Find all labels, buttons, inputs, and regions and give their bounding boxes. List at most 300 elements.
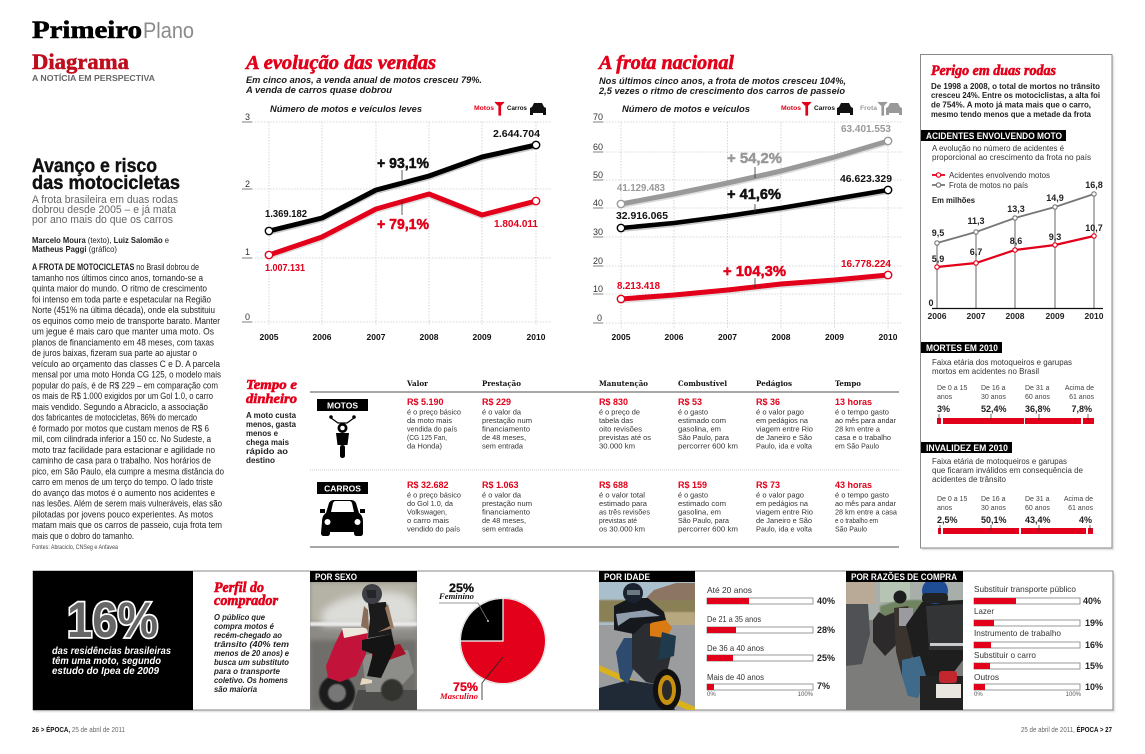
table cells: cars row: as três revisões: [599, 508, 650, 516]
table cells: motorcycles row: em pedágios na: [756, 416, 809, 425]
fleet subheading: Nos últimos cinco anos, a frota de motos cresceu 104%,: [599, 76, 846, 87]
article body text: é formado por motos que custam menos de R$ 6: [32, 423, 209, 433]
callout: 16 percent: 16%: [67, 592, 158, 648]
table cells: motorcycles row: gasolina, em: [678, 424, 721, 434]
table cells: cars row: do Gol 1.0, da: [407, 499, 454, 508]
line chart: sales: 1.804.011: [494, 218, 538, 230]
line chart: fleet: 46.623.329: [840, 173, 892, 185]
bar chart: by purchase reason: Instrumento de trabalho: [974, 629, 1061, 638]
line chart: accidents vs fleet: 14,9: [1046, 193, 1064, 203]
table cells: motorcycles row: R$ 53: [678, 397, 702, 407]
line chart: sales: 2010: [527, 332, 546, 342]
row label: motos: [317, 399, 368, 411]
line chart: accidents vs fleet: 2007: [967, 311, 986, 321]
sources note: Fontes: Abraciclo, CNSeg e Anfavea: [32, 545, 119, 551]
table cells: cars row: R$ 159: [678, 480, 707, 490]
line chart: fleet: + 54,2%: [727, 151, 782, 167]
stacked bar: disability by age: anos: [937, 505, 953, 512]
accidents legend: Frota de motos no país: [949, 181, 1028, 190]
bar chart: by age: Até 20 anos: [707, 586, 752, 595]
line chart: fleet: 60: [593, 142, 603, 152]
line chart: accidents vs fleet: 10,7: [1085, 223, 1103, 233]
bar chart: by purchase reason: 0%: [974, 692, 983, 698]
heading: Tempo e dinheiro: Tempo e: [246, 378, 297, 393]
table cells: motorcycles row: viagem entre Rio: [756, 424, 813, 434]
table intro text: menos e: [246, 429, 279, 438]
stacked bar: disability by age: 61 anos: [1068, 505, 1093, 512]
article headline: [32, 156, 180, 194]
chart legend: Motos: [474, 105, 494, 112]
chart legend: Carros: [507, 105, 527, 112]
article body text: mais vendido. Segundo a Abraciclo, a associação: [32, 402, 208, 412]
section header: Primeiro Plano: Primeiro: [32, 17, 142, 44]
line chart: accidents vs fleet: [928, 180, 1104, 321]
stacked bar: disability by age: 60 anos: [1025, 505, 1050, 512]
table cells: motorcycles row: em São Paulo: [835, 442, 879, 450]
row label: carros: [317, 482, 368, 494]
section header: Primeiro Plano: Plano: [143, 18, 194, 43]
bar chart: by purchase reason: 100%: [1066, 692, 1082, 698]
line chart: fleet: 2010: [879, 332, 898, 342]
table cells: motorcycles row: [407, 397, 896, 450]
stacked bar: disability by age: Acima de: [1064, 496, 1093, 503]
table column headers: Valor: [406, 379, 428, 388]
article body text: tamanho nos últimos cinco anos, tornando-se a: [32, 273, 203, 283]
buyer profile text: trânsito (40% tem: [214, 639, 290, 649]
byline: Marcelo Moura (texto), Luiz Salomão e: [32, 235, 169, 245]
table column headers: Combustível: [678, 379, 727, 388]
panel intro text: cresceu 24%. Entre os motociclistas, a alta foi: [931, 91, 1100, 100]
buyer profile text: para o transporte: [213, 666, 280, 676]
bar chart: by age: 100%: [798, 692, 814, 698]
article body text: pico, em São Paulo, ela cumpre a mesma distância do: [32, 466, 224, 476]
table cells: cars row: é o valor total: [599, 490, 645, 500]
heading: Perfil do comprador: comprador: [214, 593, 278, 609]
table cells: cars row: R$ 1.063: [482, 480, 519, 490]
bar chart: by purchase reason: Lazer: [974, 607, 994, 616]
panel intro text: De 1998 a 2008, o total de mortos no trânsito: [931, 82, 1100, 91]
bar chart: by age: De 21 a 35 anos: [707, 615, 761, 624]
footer: right page folio: 25 de abril de 2011, ÉPOCA > 27: [1021, 725, 1112, 734]
article body text: caminho de casa para o trabalho. Nos horários de: [32, 456, 211, 466]
section label: Diagrama: [32, 49, 155, 83]
table cells: cars row: o carro mais: [407, 516, 449, 525]
table cells: motorcycles row: 13 horas: [835, 397, 872, 407]
table cells: cars row: ao mês para andar: [835, 499, 896, 508]
line chart: accidents vs fleet: 0: [928, 298, 934, 308]
panel intro text: mesmo tendo menos que a metade da frota: [931, 110, 1091, 119]
panel: buyer profile strip: [33, 571, 1115, 712]
article body text: mais que o dobro do tamanho.: [32, 531, 134, 541]
article body text: os mais de R$ 1.000 exigidos por um Gol 1.0, o carro: [32, 391, 213, 401]
section label: Diagrama: A NOTÍCIA EM PERSPECTIVA: [32, 73, 155, 83]
article body text: os equinos como meio de transporte barato. Manter: [32, 316, 220, 326]
article body text: carro em menos de um terço do tempo. O lado triste: [32, 477, 213, 487]
stacked bar: deaths by age: 7,8%: [1071, 404, 1092, 414]
line chart: fleet: 50: [593, 170, 603, 180]
panel: national fleet: [593, 52, 903, 342]
pie chart: by sex: 25%: [449, 581, 474, 595]
accidents description: A evolução no número de acidentes é: [932, 144, 1065, 153]
panel: sales evolution: [242, 52, 551, 342]
table cells: motorcycles row: tabela das: [599, 416, 633, 425]
article body text: veículo ao orçamento das classes C e D. A parcela: [32, 359, 220, 369]
stacked bar: disability by age: 43,4%: [1025, 515, 1051, 525]
disability description: que ficaram inválidos em consequência de: [932, 466, 1084, 475]
table intro text: menos, gasta: [246, 420, 297, 429]
bar chart: by age: 0%: [707, 692, 716, 698]
line chart: fleet: 2007: [718, 332, 737, 342]
sales subheading: A venda de carros quase dobrou: [245, 85, 392, 96]
chart title: Número de motos e veículos: [622, 104, 750, 115]
table cells: motorcycles row: Paulo, ida e volta: [756, 442, 813, 450]
article body text: mensal por uma moto Honda CG 125, o modelo mais: [32, 370, 222, 380]
bar chart: by age: 40%: [817, 596, 835, 606]
table cells: cars row: 28 km entre a casa: [835, 508, 898, 516]
table cells: cars row: R$ 688: [599, 480, 628, 490]
disability description: Faixa etária de motoqueiros e garupas: [932, 457, 1067, 466]
bar chart: by purchase reason: Outros: [974, 673, 999, 682]
stacked bar: deaths by age: [937, 385, 1094, 424]
table cells: motorcycles row: estimado com: [678, 416, 726, 425]
line chart: fleet: 0: [597, 313, 602, 323]
stacked bar: disability by age: De 0 a 15: [937, 496, 967, 503]
buyer profile text: coletivo. Os homens: [214, 675, 288, 685]
table cells: cars row: [407, 480, 898, 534]
footer: left page folio: 26 > ÉPOCA, 25 de abril de 2011: [32, 725, 125, 734]
line chart: sales: 2009: [473, 332, 492, 342]
line chart: accidents vs fleet: 9,5: [932, 228, 944, 238]
stacked bar: deaths by age: De 0 a 15: [937, 385, 967, 392]
table cells: cars row: prestação num: [482, 499, 532, 508]
panel: danger on two wheels: [920, 54, 1114, 550]
table cells: motorcycles row: São Paulo, para: [678, 433, 730, 442]
line chart: accidents vs fleet: 2006: [928, 311, 947, 321]
line chart: sales: 1.369.182: [265, 208, 307, 220]
line chart: fleet: 8.213.418: [617, 280, 660, 292]
stacked bar: disability by age: De 16 a: [981, 496, 1006, 503]
subheading bar: mortes: MORTES EM 2010: [926, 343, 998, 354]
stacked bar: disability by age: 2,5%: [937, 515, 958, 525]
line chart: sales: 2.644.704: [493, 128, 540, 140]
line chart: sales: 2006: [313, 332, 332, 342]
stacked bar: deaths by age: 3%: [937, 404, 950, 414]
heading: A evolução das vendas: A evolução das vendas: [244, 52, 436, 74]
buyer profile text: [213, 612, 290, 694]
table cells: cars row: Volkswagen,: [407, 508, 447, 516]
line chart: accidents vs fleet: 5,9: [932, 254, 944, 264]
table cells: cars row: São Paulo: [835, 524, 867, 534]
line chart: sales: 3: [245, 112, 250, 122]
table cells: motorcycles row: de Janeiro e São: [756, 433, 812, 442]
bar chart: by age: 28%: [817, 625, 835, 635]
line chart: sales: 2008: [420, 332, 439, 342]
chart legend: [781, 102, 902, 115]
buyer profile text: são maioria: [214, 684, 257, 694]
accidents legend: Acidentes envolvendo motos: [949, 171, 1050, 180]
line chart: fleet: 2006: [665, 332, 684, 342]
table column headers: [406, 379, 861, 388]
unit label: Em milhões: [932, 196, 976, 205]
table cells: motorcycles row: é o valor da: [482, 408, 522, 416]
table column headers: Tempo: [835, 379, 861, 388]
chart legend: Motos: [781, 105, 801, 112]
buyer profile text: busca um substituto: [214, 657, 289, 667]
line chart: accidents vs fleet: 2008: [1006, 311, 1025, 321]
article subheading: A frota brasileira em duas rodas: [32, 194, 178, 206]
chart legend: [474, 102, 546, 115]
accidents legend: [932, 171, 1050, 190]
callout: 16 percent: [33, 571, 193, 710]
subheading bar: invalidez: INVALIDEZ EM 2010: [926, 443, 1008, 454]
table cells: motorcycles row: percorrer 600 km: [678, 442, 738, 450]
line chart: fleet: 2005: [612, 332, 631, 342]
table cells: motorcycles row: é o preço básico: [407, 408, 461, 416]
bar chart: by age: Mais de 40 anos: [707, 673, 764, 682]
line chart: accidents vs fleet: 2009: [1046, 311, 1065, 321]
buyer profile text: compra motos é: [214, 621, 274, 631]
line chart: accidents vs fleet: 16,8: [1085, 180, 1103, 190]
article body text: de juros baixas, fizeram sua parte ao ajustar o: [32, 348, 197, 358]
article body text: pilotadas por jovens pouco experientes. As motos: [32, 510, 214, 520]
article body text: planos de financiamento em 48 meses, com taxas: [32, 337, 215, 347]
line chart: accidents vs fleet: 9,3: [1049, 232, 1061, 242]
article body text: foi intenso em toda parte e espetacular na Região: [32, 294, 211, 304]
bar chart: by purchase reason: 15%: [1085, 661, 1103, 671]
bar chart: by purchase reason: Substituir o carro: [974, 651, 1036, 660]
table cells: cars row: Paulo, ida e volta: [756, 524, 813, 534]
table cells: motorcycles row: da Honda): [407, 442, 442, 450]
buyer profile text: O público que: [214, 612, 265, 622]
table cells: cars row: é o valor pago: [756, 490, 804, 500]
callout: 16 percent: das residências brasileiras: [52, 646, 171, 657]
bar chart: by purchase reason: 40%: [1083, 596, 1101, 606]
line chart: sales: + 93,1%: [377, 156, 429, 172]
table cells: motorcycles row: financiamento: [482, 424, 530, 434]
bar chart: by purchase reason: 10%: [1085, 682, 1103, 692]
byline: Matheus Paggi (gráfico): [32, 244, 117, 254]
table column headers: Manutenção: [599, 379, 648, 388]
photo: rider on sport motorcycle: [599, 582, 695, 711]
article headline: das motocicletas: [32, 173, 180, 194]
article body text: um jegue é mais caro que manter uma moto. Os: [32, 327, 215, 337]
table cells: cars row: financiamento: [482, 508, 530, 516]
deaths description: Faixa etária dos motoqueiros e garupas: [932, 358, 1072, 367]
table cells: cars row: São Paulo, para: [678, 516, 730, 525]
article body text: A FROTA DE MOTOCICLETAS no Brasil dobrou de: [32, 262, 199, 272]
line chart: fleet: 41.129.483: [617, 182, 665, 194]
bar chart: by purchase reason: [974, 585, 1103, 698]
byline: [32, 235, 169, 254]
table cells: cars row: em pedágios na: [756, 499, 809, 508]
stacked bar: deaths by age: Acima de: [1065, 385, 1094, 392]
sales subheading: [245, 75, 482, 96]
table cells: motorcycles row: casa e o trabalho: [835, 433, 891, 442]
stacked bar: deaths by age: 36,8%: [1025, 404, 1051, 414]
section header: Primeiro Plano: [32, 17, 194, 44]
icon: motorcycle: [329, 415, 356, 458]
line chart: sales: 1.007.131: [265, 262, 305, 274]
bar chart: by age: De 36 a 40 anos: [707, 644, 764, 653]
table cells: motorcycles row: (CG 125 Fan,: [407, 433, 447, 442]
photo label: por idade: POR IDADE: [604, 572, 650, 582]
line chart: fleet: + 104,3%: [723, 264, 786, 280]
panel intro text: de 754%. A moto já mata mais que o carro,: [931, 100, 1091, 110]
heading: Perfil do comprador: [214, 580, 278, 609]
chart title: Número de motos e veículos leves: [270, 104, 422, 115]
subheading bar: acidentes: ACIDENTES ENVOLVENDO MOTO: [926, 131, 1062, 142]
table cells: motorcycles row: é o tempo gasto: [835, 408, 889, 416]
line chart: accidents vs fleet: 11,3: [967, 216, 985, 226]
table cells: motorcycles row: 30.000 km: [599, 442, 635, 450]
stacked bar: disability by age: De 31 a: [1025, 496, 1050, 503]
table cells: motorcycles row: vendida do país: [407, 424, 457, 434]
article subheading: dobrou desde 2005 – e já mata: [32, 204, 177, 216]
line chart: fleet: + 41,6%: [727, 187, 781, 203]
bar chart: by age: 7%: [817, 681, 830, 691]
table cells: cars row: 43 horas: [835, 480, 872, 490]
table intro text: rápido ao: [246, 447, 288, 456]
table cells: motorcycles row: R$ 229: [482, 397, 511, 407]
table cells: motorcycles row: R$ 830: [599, 397, 628, 407]
table cells: motorcycles row: prestação num: [482, 416, 532, 425]
article body text: quinta maior do mundo. O ritmo de crescimento: [32, 284, 207, 294]
table cells: motorcycles row: é o gasto: [678, 408, 708, 416]
table cells: cars row: estimado para: [599, 499, 648, 508]
article body text: popular do país, é de R$ 229 – em comparação com: [32, 380, 218, 390]
table cells: cars row: e o trabalho em: [835, 516, 878, 525]
bar chart: by purchase reason: 16%: [1085, 640, 1103, 650]
stacked bar: disability by age: 4%: [1079, 515, 1092, 525]
photo label: por idade: [599, 571, 695, 582]
photo: motorcyclists in traffic: [846, 578, 963, 710]
table cells: cars row: de 48 meses,: [482, 516, 526, 525]
table cells: cars row: é o tempo gasto: [835, 490, 889, 500]
photo label: por sexo: POR SEXO: [315, 572, 357, 582]
table cells: cars row: os 30.000 km: [599, 524, 645, 534]
table cells: cars row: é o gasto: [678, 490, 708, 500]
line chart: sales: 1: [245, 247, 250, 257]
row label: carros: CARROS: [324, 484, 361, 494]
stacked bar: deaths by age: 60 anos: [1025, 394, 1050, 401]
table cells: motorcycles row: sem entrada: [482, 442, 524, 450]
table cells: motorcycles row: é o valor pago: [756, 408, 804, 416]
line chart: fleet: 2008: [772, 332, 791, 342]
table cells: cars row: é o preço básico: [407, 490, 461, 500]
table intro text: destino: [246, 456, 275, 465]
line chart: accidents vs fleet: 8,6: [1010, 236, 1022, 246]
line chart: fleet: 2009: [825, 332, 844, 342]
article body text: matam mais que os carros de passeio, cuja frota tem: [32, 520, 222, 530]
article body text: [32, 262, 224, 541]
section label: Diagrama: Diagrama: [32, 49, 129, 74]
table cells: cars row: é o valor da: [482, 490, 522, 500]
heading: Perigo em duas rodas: Perigo em duas rodas: [931, 63, 1056, 79]
table cells: motorcycles row: R$ 36: [756, 397, 780, 407]
table cells: motorcycles row: previstas até os: [599, 433, 651, 442]
line chart: sales: + 79,1%: [377, 217, 429, 233]
accidents description: [932, 144, 1091, 162]
line chart: fleet: 30: [593, 227, 603, 237]
fleet subheading: 2,5 vezes o ritmo de crescimento dos carros de passeio: [598, 86, 845, 97]
table cells: cars row: vendido do país: [407, 524, 460, 534]
line chart: accidents vs fleet: 13,3: [1007, 204, 1025, 214]
stacked bar: disability by age: 50,1%: [981, 515, 1007, 525]
icon: car: [320, 500, 365, 536]
table cells: motorcycles row: de 48 meses,: [482, 433, 526, 442]
callout: 16 percent: estudo do Ipea de 2009: [52, 666, 159, 677]
table cells: motorcycles row: é o preço de: [599, 408, 640, 416]
article body text: mil, com cilindrada inferior a 150 cc. No Sudeste, a: [32, 434, 211, 444]
stacked bar: deaths by age: De 16 a: [981, 385, 1006, 392]
stacked bar: deaths by age: 61 anos: [1069, 394, 1094, 401]
heading: Tempo e dinheiro: [246, 378, 297, 407]
table cells: cars row: sem entrada: [482, 524, 524, 534]
table cells: cars row: estimado com: [678, 499, 726, 508]
line chart: sales: [242, 112, 551, 342]
buyer profile text: recém-chegado ao: [214, 630, 282, 640]
pie chart: by sex: Feminino: [438, 592, 474, 601]
article subheading: [32, 194, 178, 226]
buyer profile text: menos de 20 anos) e: [214, 648, 289, 658]
line chart: fleet: 63.401.553: [841, 123, 891, 135]
line chart: accidents vs fleet: 2010: [1085, 311, 1104, 321]
table cells: cars row: de Janeiro e São: [756, 516, 812, 525]
bar chart: by purchase reason: Substituir transporte público: [974, 585, 1076, 594]
table intro text: chega mais: [246, 438, 290, 447]
pie chart: by sex: Masculino: [439, 692, 478, 701]
line chart: fleet: 40: [593, 198, 603, 208]
table intro text: A moto custa: [246, 411, 297, 420]
table cells: motorcycles row: R$ 5.190: [407, 397, 444, 407]
stacked bar: disability by age: [937, 496, 1093, 534]
table cells: cars row: previstas até: [599, 516, 637, 525]
line chart: sales: 2007: [367, 332, 386, 342]
table cells: cars row: percorrer 600 km: [678, 524, 738, 534]
stacked bar: deaths by age: De 31 a: [1025, 385, 1050, 392]
table cells: cars row: R$ 73: [756, 480, 780, 490]
table cells: cars row: gasolina, em: [678, 508, 721, 516]
table cells: motorcycles row: oito revisões: [599, 424, 642, 434]
stacked bar: deaths by age: 52,4%: [981, 404, 1007, 414]
disability description: acidentes de trânsito: [932, 475, 1007, 484]
stacked bar: deaths by age: 30 anos: [981, 394, 1006, 401]
chart legend: Frota: [860, 105, 877, 112]
table cells: motorcycles row: da moto mais: [407, 416, 452, 425]
table intro text: [246, 411, 297, 465]
callout: 16 percent: têm uma moto, segundo: [52, 656, 161, 667]
table cells: cars row: R$ 32.682: [407, 480, 449, 490]
bar chart: by purchase reason: 19%: [1085, 618, 1103, 628]
table cells: cars row: viagem entre Rio: [756, 508, 813, 516]
stacked bar: deaths by age: anos: [937, 394, 953, 401]
chart legend: Carros: [814, 105, 835, 112]
photo label: por sexo: [310, 571, 417, 582]
heading: Perfil do comprador: Perfil do: [214, 580, 264, 596]
bar chart: by age: [707, 586, 835, 698]
line chart: fleet: 16.778.224: [841, 258, 891, 270]
deaths description: [932, 358, 1072, 376]
table column headers: Pedágios: [756, 379, 792, 388]
article body text: dos fabricantes de motocicletas, 86% do mercado: [32, 413, 197, 423]
line chart: fleet: 32.916.065: [616, 210, 668, 222]
article body text: do avanço das motos é o aumento nos acidentes e: [32, 488, 215, 498]
table column headers: Prestação: [482, 379, 521, 388]
line chart: fleet: 70: [593, 112, 603, 122]
sales subheading: Em cinco anos, a venda anual de motos cresceu 79%.: [246, 75, 482, 86]
line chart: sales: 2005: [260, 332, 279, 342]
panel: time and money table: [246, 378, 899, 547]
